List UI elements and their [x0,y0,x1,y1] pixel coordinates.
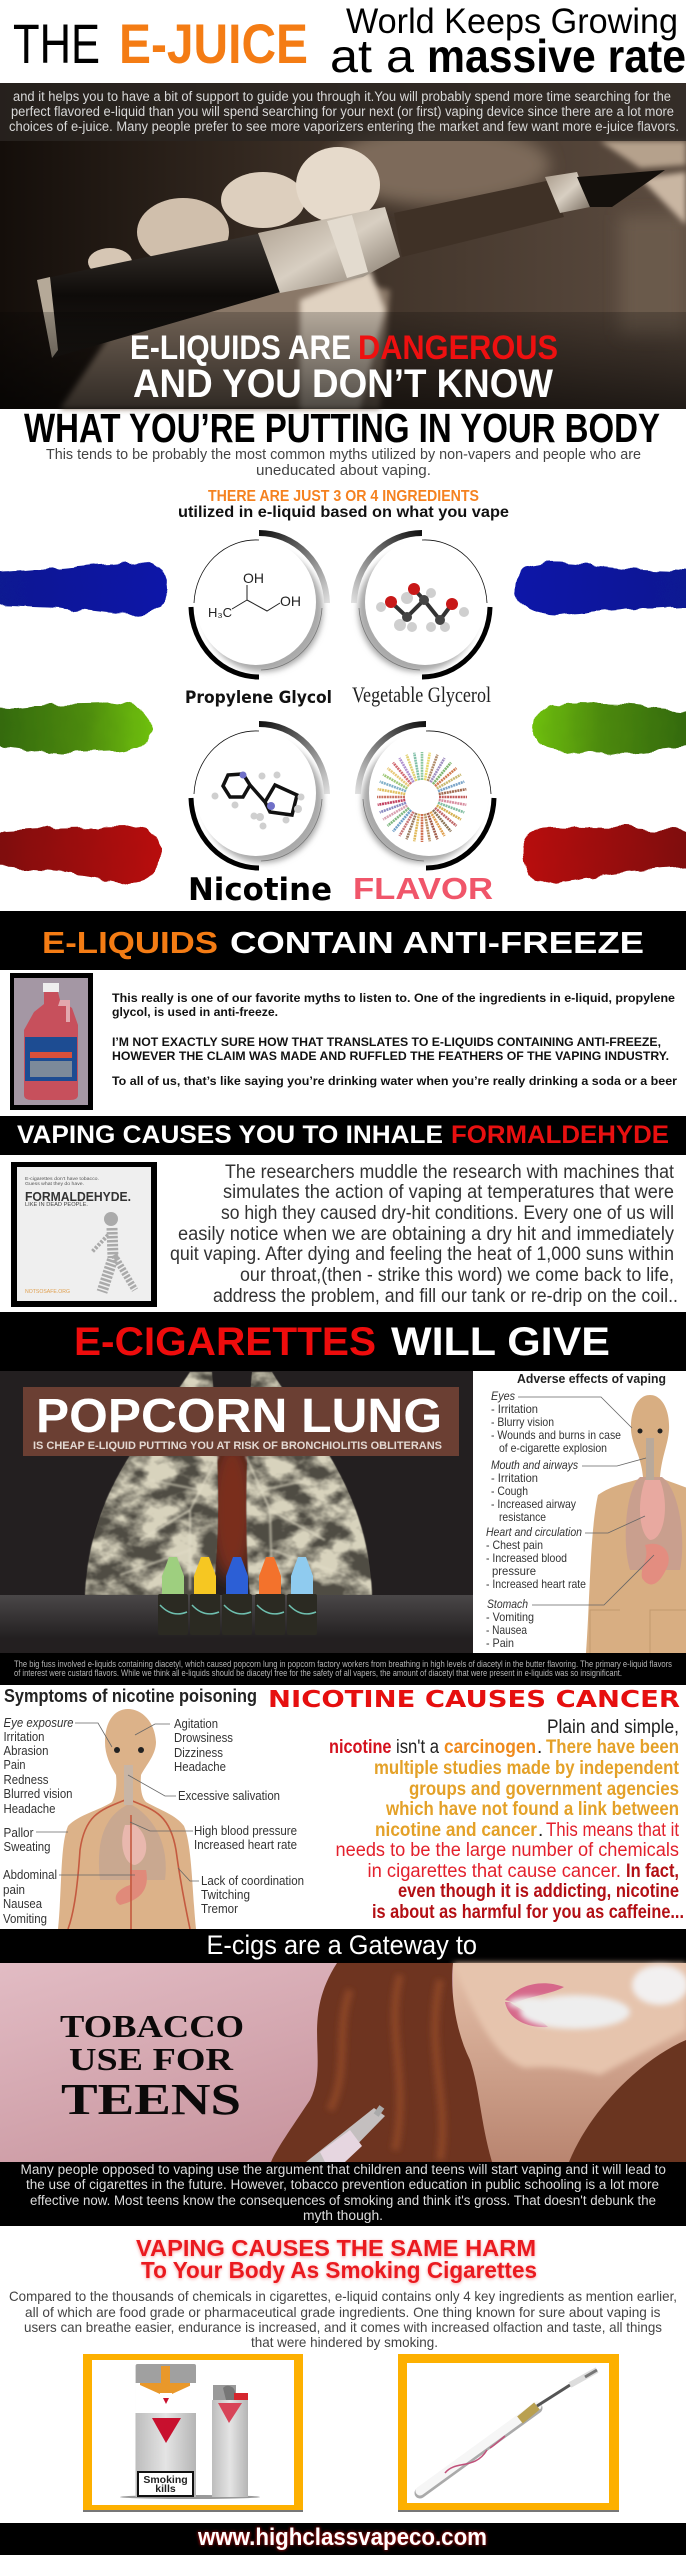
adverse effects text: - Irritation [491,1471,538,1485]
text block: nicotine causes cancer [329,1717,684,1923]
text block: gateway explanation: the use of cigarettes in the future. However, tobacco prevention education in public schooling is a lot more [26,2177,659,2192]
symptoms left labels: Pain [4,1758,26,1772]
text block: diacetyl note [0,1653,686,1685]
hero headline: DANGEROUS [358,329,558,367]
footer: website url: www.highclassvapeco.com [197,2524,487,2551]
symptoms left labels: pain [3,1883,25,1897]
label: nicotine: Nicotine [188,872,332,908]
adverse effects text: - Chest pain [486,1538,543,1552]
title: the e-juice world keeps growing: World Keeps Growing [346,2,678,41]
title: the e-juice world keeps growing [13,2,686,82]
subheading: ingredients: THERE ARE JUST 3 OR 4 INGREDIENTS [208,488,479,505]
icon: propylene glycol: OH [243,570,264,586]
panel: teen vaping photo [0,1963,686,2162]
label: propylene glycol: Propylene Glycol [185,688,332,708]
adverse effects text: - Cough [491,1484,528,1498]
symptoms left labels: Headache [4,1802,56,1816]
text block: same harm explanation: users can breathe easier, endurance is increased, and it comes with increased olfaction and taste, all things [24,2319,662,2335]
symptoms left labels: Blurred vision [4,1787,73,1801]
text block: nicotine causes cancer: . [538,1820,543,1841]
symptoms right labels: Dizziness [174,1746,223,1760]
adverse effects text: pressure [492,1564,536,1578]
image: formaldehyde poster: Guess what they do have. [25,1181,84,1186]
symptoms right labels: Agitation [174,1717,218,1731]
text block: nicotine causes cancer: nicotine and cancer [375,1820,538,1841]
adverse effects text: - Increased heart rate [486,1577,586,1591]
label: flavor: FLAVOR [353,871,493,906]
hero intro text: choices of e-juice. Many people prefer to see more vaporizers entering the market and few want more e-juice flavors. [9,119,679,134]
photo headline: tobacco use for teens: TOBACCO [60,2008,244,2044]
adverse effects text: - Increased airway [491,1497,576,1511]
text block: nicotine causes cancer: carcinogen [444,1737,536,1758]
banner: popcorn lung: POPCORN LUNG [36,1390,442,1443]
adverse effects text: Eyes [491,1389,515,1403]
illustration: symptoms body [58,1709,196,1929]
symptoms left labels: Nausea [3,1897,42,1911]
adverse effects text [486,1371,666,1650]
photo headline: tobacco use for teens: USE FOR [69,2041,234,2077]
heading: vaping causes the same harm [136,2235,537,2283]
symptoms left labels: Eye exposure [4,1716,74,1730]
hero headline: AND YOU DON’T KNOW [133,362,553,406]
symptoms left labels: Pallor [4,1826,34,1840]
text block: formaldehyde research: simulates the action of vaping at temperatures that were [223,1182,674,1203]
hero headline: E-LIQUIDS ARE [130,329,351,367]
text block: gateway explanation: myth though. [303,2208,383,2223]
title: the e-juice world keeps growing: E-JUICE [119,12,308,75]
symptoms right labels: Excessive salivation [178,1789,280,1803]
label: vegetable glycerol: Vegetable Glycerol [352,682,491,707]
text block: gateway explanation [0,2162,686,2226]
text block: nicotine causes cancer: in cigarettes that cause cancer. [368,1861,621,1882]
hero intro text: and it helps you to have a bit of support to guide you through it.You will probably spend more time searching for the [13,89,671,104]
panel: anti-freeze heading band: E-LIQUIDS [42,925,218,960]
text block: anti-freeze myth: HOWEVER THE CLAIM WAS MADE AND RUFFLED THE FEATHERS OF THE VAPING INDUSTRY. [112,1049,669,1063]
photo headline: tobacco use for teens [60,2008,244,2124]
heading: vaping causes the same harm: VAPING CAUSES THE SAME HARM [136,2235,536,2261]
symptoms right labels [174,1717,304,1916]
symptoms left labels: Redness [4,1773,48,1787]
adverse effects text: of e-cigarette explosion [499,1441,607,1455]
intro paragraph: This tends to be probably the most common myths utilized by non-vapers and people who are [46,447,641,463]
symptoms right labels: Increased heart rate [194,1838,297,1852]
image: crystal vape pen [306,2105,385,2162]
symptoms right labels: Twitching [201,1888,250,1902]
decorative paint blobs [0,562,686,884]
text block: nicotine causes cancer: . [537,1737,542,1758]
hero intro text [0,83,686,141]
adverse effects text: - Blurry vision [491,1415,554,1429]
icon: propylene glycol: H₃C [208,605,232,620]
intro paragraph: uneducated about vaping. [256,463,431,479]
banner: popcorn lung [23,1387,459,1456]
image: anti-freeze bottle [10,973,93,1110]
panel: e-cigarettes will give heading band: WILL GIVE [391,1320,610,1364]
panel: symptoms of nicotine poisoning: Symptoms of nicotine poisoning [4,1686,257,1706]
title: the e-juice world keeps growing: at a [330,30,414,82]
cigarette pack: kills [155,2483,176,2495]
text block: same harm explanation: that were hindered by smoking. [251,2334,438,2350]
panel: formaldehyde heading band [0,1116,686,1155]
footer: website url [0,2523,686,2555]
lips [505,1983,564,2027]
text block: anti-freeze myth: To all of us, that’s like saying you’re drinking water when you’re really drinking a soda or a beer [112,1074,677,1088]
symptoms right labels: High blood pressure [194,1824,297,1838]
leader lines [36,1723,199,1881]
text block: anti-freeze myth: I’M NOT EXACTLY SURE HOW THAT TRANSLATES TO E-LIQUIDS CONTAINING ANTI-FREEZE, [112,1035,661,1049]
hero headline [130,329,558,406]
leader lines [518,1397,654,1605]
panel: symptoms of nicotine poisoning [3,1686,304,1929]
symptoms right labels: Tremor [201,1902,238,1916]
image: cigarettes and lighter [83,2354,303,2512]
cigarette pack [136,2364,196,2497]
lighter [212,2385,248,2497]
panel: e-cigarettes will give heading band [0,1312,686,1371]
symptoms left labels: Irritation [4,1730,45,1744]
heading: vaping causes the same harm: To Your Body As Smoking Cigarettes [141,2257,537,2283]
panel: popcorn lung image [0,1371,473,1653]
panel: anti-freeze heading band [0,911,686,970]
adverse effects text: - Wounds and burns in case [491,1428,621,1442]
subheading: ingredients [178,488,509,521]
text block: same harm explanation [9,2288,677,2350]
symptoms left labels [3,1716,74,1926]
adverse effects text: Stomach [487,1597,528,1611]
text block: anti-freeze myth: This really is one of our favorite myths to listen to. One of the ingredients in e-liquid, propylene [112,991,675,1005]
title: the e-juice world keeps growing: THE [13,12,100,75]
image: formaldehyde poster: LIKE IN DEAD PEOPLE. [25,1202,88,1208]
icon: flavor wheel [358,724,494,868]
text block: nicotine causes cancer: nicotine [329,1737,392,1758]
text block: formaldehyde research [170,1162,678,1307]
symptoms right labels: Lack of coordination [201,1874,304,1888]
symptoms right labels: Headache [174,1760,226,1774]
text block: anti-freeze myth: glycol, is used in anti-freeze. [112,1005,278,1019]
adverse effects text: - Vomiting [486,1610,534,1624]
icons: e-liquid bottles [158,1557,317,1635]
text block: gateway explanation: effective now. Most teens know the consequences of smoking and think it's gross. That doesn't debunk the [30,2193,656,2208]
image: formaldehyde poster: FORMALDEHYDE. [25,1189,131,1204]
panel: hero vaping photo [0,83,686,409]
text block: formaldehyde research: easily notice when we are obtaining a dry hit and immediately [178,1224,674,1245]
adverse effects text: - Nausea [486,1623,527,1637]
symptoms left labels: Abdominal [3,1868,57,1882]
banner: popcorn lung: IS CHEAP E-LIQUID PUTTING YOU AT RISK OF BRONCHIOLITIS OBLITERANS [33,1440,442,1452]
image: vape pen [398,2354,619,2512]
icon: nicotine [191,724,327,868]
symptoms right labels: Drowsiness [174,1731,233,1745]
cigarette pack: Smoking [143,2474,188,2486]
icon: propylene glycol [191,533,327,677]
subheading: ingredients: utilized in e-liquid based on what you vape [178,504,509,521]
text block: same harm explanation: all of which are food grade or pharmaceutical grade ingredients. One thing known for sure about vaping is [25,2304,660,2320]
text block: gateway explanation: Many people opposed to vaping use the argument that children and teens will start vaping and it will lead to [20,2162,666,2177]
image: formaldehyde poster: NOTSOSAFE.ORG [25,1289,70,1295]
illustration: adverse body [586,1395,686,1653]
adverse effects text: - Irritation [491,1402,538,1416]
panel: adverse effects of vaping [473,1371,686,1653]
photo headline: tobacco use for teens: TEENS [61,2075,241,2124]
image: formaldehyde poster [11,1162,157,1307]
panel: gateway heading band [0,1929,686,1963]
panel: e-cigarettes will give heading band: E-CIGARETTES [74,1320,376,1364]
heading: nicotine causes cancer: NICOTINE CAUSES CANCER [268,1687,680,1713]
illustration: lungs [85,1372,372,1595]
adverse effects text: Heart and circulation [486,1525,582,1539]
adverse effects text: resistance [499,1510,546,1524]
adverse effects text: Mouth and airways [491,1458,578,1472]
panel: anti-freeze heading band: CONTAIN ANTI-FREEZE [230,925,644,960]
panel: formaldehyde heading band: FORMALDEHYDE [451,1121,669,1149]
text block: nicotine causes cancer: isn't a [396,1737,439,1758]
panel: formaldehyde heading band: VAPING CAUSES YOU TO INHALE [17,1121,443,1149]
image: formaldehyde poster: E-cigarettes don’t have tobacco. [25,1176,99,1181]
adverse effects text: - Pain [486,1636,514,1650]
text block: nicotine causes cancer: needs to be the large number of chemicals [336,1840,679,1861]
panel: gateway heading band: E-cigs are a Gateway to [206,1930,477,1960]
symptoms left labels: Sweating [4,1840,51,1854]
adverse effects text: Adverse effects of vaping [517,1371,666,1386]
hero intro text: perfect flavored e-liquid than you will spend searching for your next (or first) vaping device since there are a lot more [11,104,674,119]
symptoms left labels: Vomiting [3,1912,47,1926]
vapor [508,1965,686,2029]
symptoms left labels: Abrasion [4,1744,49,1758]
text block: anti-freeze myth [112,991,677,1088]
adverse effects text: - Increased blood [486,1551,567,1565]
intro paragraph [46,447,641,479]
text block: nicotine causes cancer: In fact, [626,1861,679,1882]
icon: vegetable glycerol [354,533,490,677]
icon: propylene glycol: OH [280,593,301,609]
